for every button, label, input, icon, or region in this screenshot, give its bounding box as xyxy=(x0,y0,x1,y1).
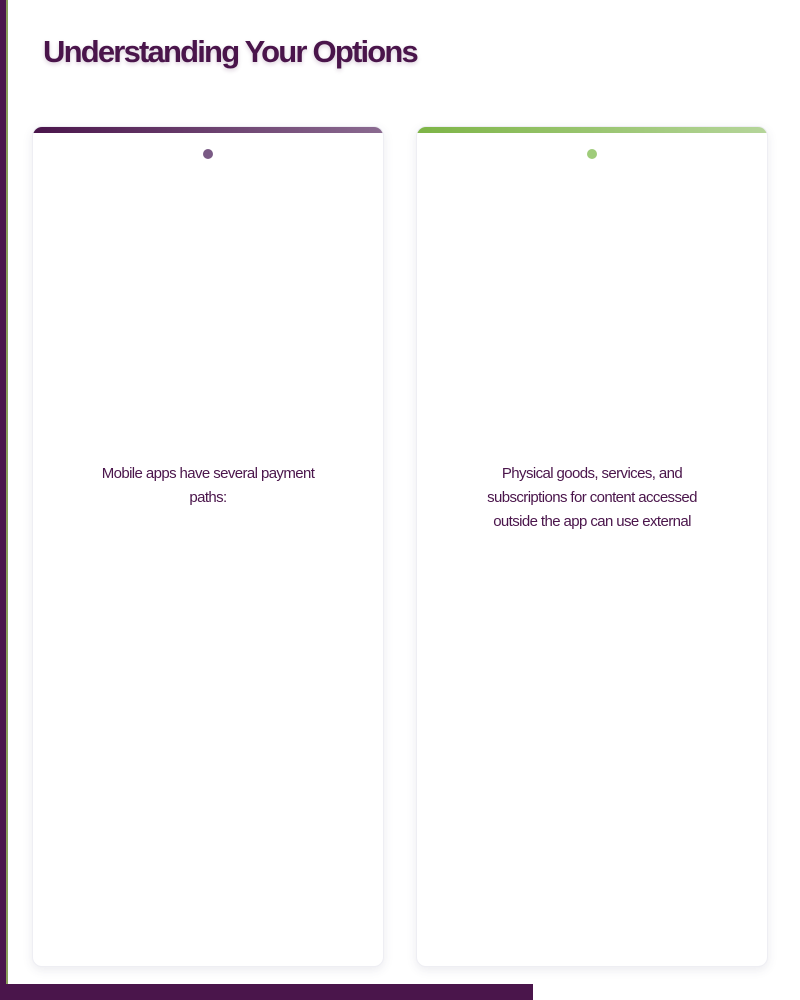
bottom bar xyxy=(0,984,533,1000)
left accent bar xyxy=(0,0,8,1000)
panel: payment paths xyxy=(32,126,384,967)
icon: dot xyxy=(587,149,597,159)
panel: external payments xyxy=(416,126,768,967)
icon: dot xyxy=(203,149,213,159)
text: external payments: Physical goods, services, and subscriptions for content accessed outside the app can use external xyxy=(487,465,697,530)
title: Understanding Your Options xyxy=(43,34,417,69)
text: payment paths: Mobile apps have several payment paths: xyxy=(102,465,314,506)
